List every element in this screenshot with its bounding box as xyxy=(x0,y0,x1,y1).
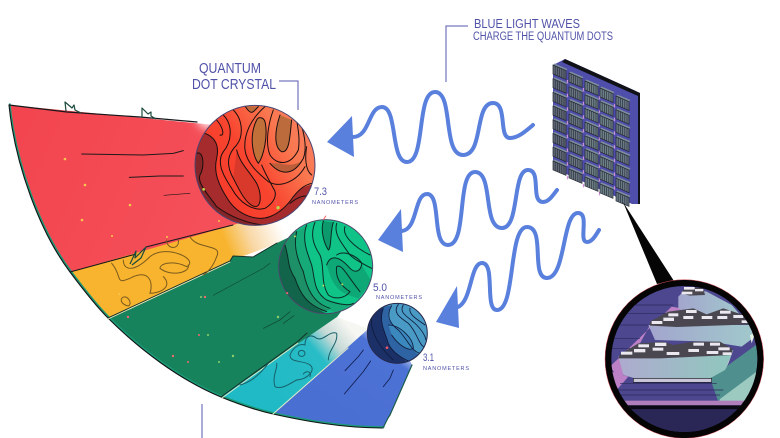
pink stripes xyxy=(612,306,682,375)
sparkle dots xyxy=(64,158,288,363)
label: quantum dot crystal xyxy=(192,60,298,110)
label: blue light waves: BLUE LIGHT WAVES xyxy=(474,17,580,31)
label: 3.1 nanometers: NANOMETERS xyxy=(423,366,469,372)
ridge tiles on slabs xyxy=(621,287,749,355)
callout line: bottom xyxy=(201,404,203,438)
ridge shadows xyxy=(618,287,750,358)
top slab xyxy=(678,291,740,314)
green segment xyxy=(108,220,350,397)
label: quantum dot crystal: QUANTUM xyxy=(199,60,261,77)
sphere: red quantum dot crystal xyxy=(194,104,316,226)
label: blue light waves: CHARGE THE QUANTUM DOTS xyxy=(473,31,613,43)
pointer: magnifier wedge xyxy=(623,202,674,284)
label: 7.3 nanometers: NANOMETERS xyxy=(312,200,358,206)
label: 3.1 nanometers xyxy=(423,352,469,372)
label: 5.0 nanometers: NANOMETERS xyxy=(376,295,422,301)
display tile grid xyxy=(553,64,630,206)
brush marks and contours xyxy=(82,151,270,306)
middle slab xyxy=(648,325,755,347)
front slab xyxy=(618,350,733,378)
sphere: green quantum dot crystal xyxy=(277,216,375,317)
pink gap ticks xyxy=(568,80,614,200)
blue segment xyxy=(273,330,412,428)
label: 7.3 nanometers: 7.3 xyxy=(314,186,327,198)
red segment xyxy=(9,105,255,272)
magnifier: close-up of display xyxy=(605,280,764,438)
arrow: wave 1 xyxy=(327,92,533,162)
label: 7.3 nanometers xyxy=(312,186,358,206)
teal background right xyxy=(711,345,758,402)
label: 5.0 nanometers: 5.0 xyxy=(373,282,387,294)
label: 5.0 nanometers xyxy=(373,282,422,301)
arrow: wave 3 xyxy=(436,213,599,328)
segment outlines xyxy=(9,104,412,428)
spiky edge jags xyxy=(65,102,156,265)
yellow segment xyxy=(70,205,300,318)
panel: quantum dot display xyxy=(553,59,640,206)
teal segment xyxy=(221,317,372,414)
panel: color fan xyxy=(9,102,412,428)
white glow at top of red segment xyxy=(198,108,218,128)
label: quantum dot crystal: DOT CRYSTAL xyxy=(192,76,276,93)
arrow: wave 2 xyxy=(378,170,557,252)
label: 3.1 nanometers: 3.1 xyxy=(423,352,434,364)
label: blue light waves xyxy=(446,17,613,82)
teal contours and blue marks xyxy=(240,312,393,394)
sphere: blue quantum dot crystal xyxy=(365,302,428,365)
